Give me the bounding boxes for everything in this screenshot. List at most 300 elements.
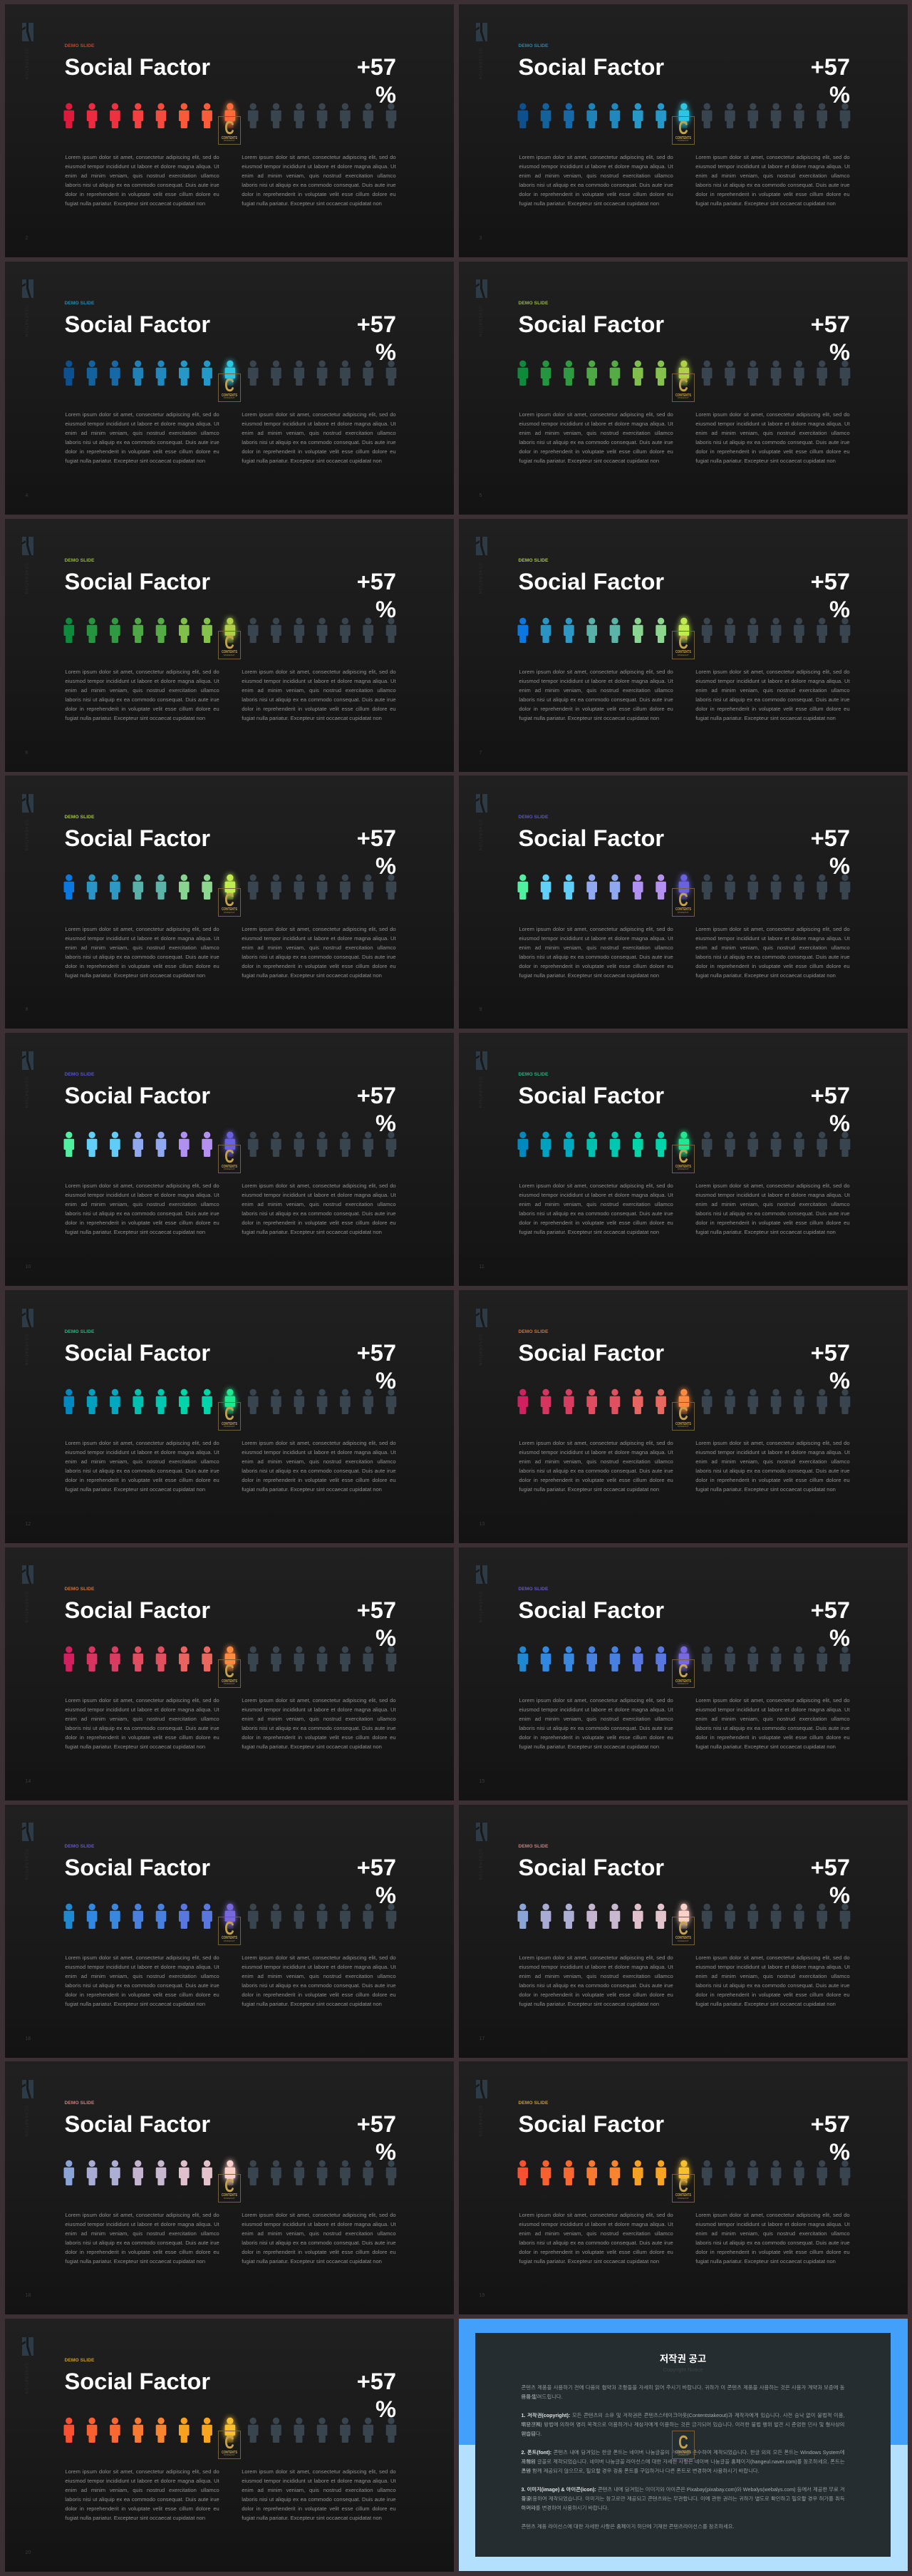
icon row: people <box>517 614 851 644</box>
icon row: people <box>63 1386 398 1418</box>
text left: eiusmod tempor incididunt ut labore et dolore magna aliqua. Ut <box>65 421 219 427</box>
logo <box>21 1051 33 1070</box>
notice subtitle: Copyright Notice <box>663 2366 703 2373</box>
badge: C <box>224 1403 234 1424</box>
title: Social Factor <box>64 1597 210 1623</box>
text right: dolor in reprehenderit in voluptate velit esse cillum dolore eu <box>242 1220 396 1226</box>
text right: laboris nisi ut aliquip ex ea commodo consequat. Duis aute irue <box>242 1468 396 1474</box>
text left <box>65 154 219 207</box>
logo <box>21 2337 33 2356</box>
icon row: people <box>64 356 396 386</box>
logo <box>476 1565 487 1584</box>
title: Social Factor <box>64 568 210 594</box>
text left: eiusmod tempor incididunt ut labore et dolore magna aliqua. Ut <box>519 1449 673 1456</box>
badge <box>672 2431 695 2459</box>
text right <box>695 1696 850 1751</box>
label: DEMO SLIDE <box>519 1329 549 1334</box>
text right: enim ad minim veniam, quis nostrud exercitation ullamco <box>695 172 850 179</box>
text right: dolor in reprehenderit in voluptate velit esse cillum dolore eu <box>242 1477 396 1483</box>
badge: STAKEOUT <box>678 911 689 914</box>
text right: fugiat nulla pariatur. Excepteur sint occaecat cupidatat non <box>695 1486 836 1493</box>
slide 18: orange <box>459 2061 908 2314</box>
text left: fugiat nulla pariatur. Excepteur sint occaecat cupidatat non <box>65 458 205 464</box>
text left: enim ad minim veniam, quis nostrud exercitation ullamco <box>65 687 219 694</box>
value <box>357 53 396 108</box>
text right: Lorem ipsum dolor sit amet, consectetur adipiscing elit, sed do <box>695 1697 850 1704</box>
text left: Lorem ipsum dolor sit amet, consectetur adipiscing elit, sed do <box>65 669 219 675</box>
badge: CONTENTS <box>675 1422 691 1426</box>
page number: 17 <box>479 2036 484 2041</box>
text right: laboris nisi ut aliquip ex ea commodo consequat. Duis aute irue <box>242 954 396 960</box>
badge <box>218 1659 241 1688</box>
logo <box>21 1565 33 1584</box>
text right: fugiat nulla pariatur. Excepteur sint occaecat cupidatat non <box>242 2515 382 2521</box>
text right <box>695 154 850 207</box>
vertical brand text: GENERATION <box>24 2106 28 2138</box>
value: % <box>829 339 850 365</box>
text left: fugiat nulla pariatur. Excepteur sint occaecat cupidatat non <box>519 200 659 207</box>
page number: 10 <box>26 1264 31 1269</box>
text right: enim ad minim veniam, quis nostrud exercitation ullamco <box>695 1201 850 1207</box>
text left <box>65 1696 219 1751</box>
text right: fugiat nulla pariatur. Excepteur sint occaecat cupidatat non <box>695 1743 836 1750</box>
text left <box>519 154 673 207</box>
badge: STAKEOUT <box>224 1425 235 1428</box>
text right: Lorem ipsum dolor sit amet, consectetur adipiscing elit, sed do <box>695 1954 850 1961</box>
text right: fugiat nulla pariatur. Excepteur sint occaecat cupidatat non <box>242 1743 382 1750</box>
text left: dolor in reprehenderit in voluptate velit esse cillum dolore eu <box>65 2249 219 2255</box>
text right <box>695 1953 850 2009</box>
label: DEMO SLIDE <box>519 43 549 48</box>
text right: enim ad minim veniam, quis nostrud exercitation ullamco <box>242 1973 396 1979</box>
text right: eiusmod tempor incididunt ut labore et dolore magna aliqua. Ut <box>695 935 850 942</box>
slide 11: teal <box>4 1290 453 1543</box>
badge <box>218 2431 241 2459</box>
label: DEMO SLIDE <box>519 2101 549 2106</box>
text right: eiusmod tempor incididunt ut labore et dolore magna aliqua. Ut <box>695 421 850 427</box>
text right: eiusmod tempor incididunt ut labore et dolore magna aliqua. Ut <box>242 421 396 427</box>
text left: dolor in reprehenderit in voluptate velit esse cillum dolore eu <box>519 1220 673 1226</box>
text right: enim ad minim veniam, quis nostrud exercitation ullamco <box>242 944 396 951</box>
badge: C <box>678 2431 688 2453</box>
title: Social Factor <box>519 2111 664 2137</box>
label: DEMO SLIDE <box>519 1844 549 1849</box>
value: % <box>829 596 850 622</box>
text right: Lorem ipsum dolor sit amet, consectetur adipiscing elit, sed do <box>695 1440 850 1446</box>
text left: dolor in reprehenderit in voluptate velit esse cillum dolore eu <box>65 706 219 712</box>
value <box>811 53 850 108</box>
badge: CONTENTS <box>222 907 237 912</box>
text left: dolor in reprehenderit in voluptate velit esse cillum dolore eu <box>519 706 673 712</box>
text left: enim ad minim veniam, quis nostrud exercitation ullamco <box>65 1716 219 1722</box>
text right: laboris nisi ut aliquip ex ea commodo consequat. Duis aute irue <box>695 1725 850 1731</box>
text right: enim ad minim veniam, quis nostrud exercitation ullamco <box>242 1458 396 1465</box>
text left: laboris nisi ut aliquip ex ea commodo consequat. Duis aute irue <box>519 1468 673 1474</box>
text left: fugiat nulla pariatur. Excepteur sint occaecat cupidatat non <box>65 2001 205 2007</box>
dark notice card <box>475 2333 891 2557</box>
label: DEMO SLIDE <box>519 1072 549 1077</box>
text left: eiusmod tempor incididunt ut labore et dolore magna aliqua. Ut <box>519 2221 673 2227</box>
text left: Lorem ipsum dolor sit amet, consectetur adipiscing elit, sed do <box>65 926 219 932</box>
text left: eiusmod tempor incididunt ut labore et dolore magna aliqua. Ut <box>519 678 673 684</box>
text left: eiusmod tempor incididunt ut labore et dolore magna aliqua. Ut <box>65 163 219 170</box>
icon row: people <box>517 100 851 130</box>
text left: Lorem ipsum dolor sit amet, consectetur adipiscing elit, sed do <box>519 926 673 932</box>
text right <box>242 1696 396 1751</box>
badge: STAKEOUT <box>678 1682 689 1685</box>
value: +57 <box>357 1339 396 1366</box>
text left: Lorem ipsum dolor sit amet, consectetur adipiscing elit, sed do <box>519 1440 673 1446</box>
badge: CONTENTS <box>222 1422 237 1426</box>
panel: copyright notice <box>459 2319 908 2571</box>
text right: fugiat nulla pariatur. Excepteur sint occaecat cupidatat non <box>242 2001 382 2007</box>
text right <box>695 411 850 464</box>
text left <box>519 1438 673 1494</box>
badge: CONTENTS <box>222 1165 237 1169</box>
text right <box>242 411 396 464</box>
text left: Lorem ipsum dolor sit amet, consectetur adipiscing elit, sed do <box>65 154 219 160</box>
text right: fugiat nulla pariatur. Excepteur sint occaecat cupidatat non <box>242 458 382 464</box>
value: +57 <box>811 1597 850 1623</box>
text right: eiusmod tempor incididunt ut labore et dolore magna aliqua. Ut <box>695 163 850 170</box>
slide 4: green <box>459 262 908 515</box>
text left: Lorem ipsum dolor sit amet, consectetur adipiscing elit, sed do <box>519 1954 673 1961</box>
badge: C <box>678 632 688 653</box>
icon row: people <box>517 356 851 386</box>
slide 10: teal <box>459 1033 908 1286</box>
text left: eiusmod tempor incididunt ut labore et dolore magna aliqua. Ut <box>65 1192 219 1198</box>
text left: Lorem ipsum dolor sit amet, consectetur adipiscing elit, sed do <box>65 1697 219 1704</box>
text left <box>65 669 219 721</box>
text left <box>65 411 219 464</box>
badge: STAKEOUT <box>678 396 689 399</box>
text right: eiusmod tempor incididunt ut labore et dolore magna aliqua. Ut <box>242 678 396 684</box>
title: Social Factor <box>64 311 210 337</box>
text left: eiusmod tempor incididunt ut labore et dolore magna aliqua. Ut <box>519 1192 673 1198</box>
page number: 3 <box>479 236 482 241</box>
text right: enim ad minim veniam, quis nostrud exercitation ullamco <box>242 687 396 694</box>
value <box>357 1853 396 1909</box>
value: +57 <box>811 1339 850 1366</box>
label: DEMO SLIDE <box>64 558 95 563</box>
text left <box>519 1953 673 2009</box>
text left: laboris nisi ut aliquip ex ea commodo consequat. Duis aute irue <box>519 182 673 188</box>
text left: enim ad minim veniam, quis nostrud exercitation ullamco <box>519 2230 673 2237</box>
vertical brand text: GENERATION <box>24 1592 28 1623</box>
text left <box>65 1181 219 1237</box>
badge: STAKEOUT <box>224 654 235 656</box>
text right: dolor in reprehenderit in voluptate velit esse cillum dolore eu <box>695 2249 850 2255</box>
text left <box>519 669 673 721</box>
notice body: 3. 이미지(image) & 아이콘(icon): 콘텐츠 내에 담겨있는 이미지와 아이콘은 Pixabay(pixabay.com)와 Webalys(webalys.com) 등에서 제공한 무료 저작물 <box>522 2486 845 2502</box>
value: +57 <box>357 53 396 80</box>
label: DEMO SLIDE <box>64 1587 95 1592</box>
label: DEMO SLIDE <box>64 1072 95 1077</box>
page number: 4 <box>26 493 28 498</box>
text left: fugiat nulla pariatur. Excepteur sint occaecat cupidatat non <box>519 715 659 721</box>
logo <box>22 279 33 298</box>
badge <box>672 1402 695 1431</box>
text left: fugiat nulla pariatur. Excepteur sint occaecat cupidatat non <box>519 458 659 464</box>
slide 14: blue to indigo <box>459 1547 908 1800</box>
page number: 14 <box>26 1779 31 1784</box>
text left: dolor in reprehenderit in voluptate velit esse cillum dolore eu <box>65 1477 219 1483</box>
slide 5: green <box>4 519 453 772</box>
text left: dolor in reprehenderit in voluptate velit esse cillum dolore eu <box>519 1477 673 1483</box>
badge <box>218 1402 241 1431</box>
text left: laboris nisi ut aliquip ex ea commodo consequat. Duis aute irue <box>65 2240 219 2246</box>
page number: 5 <box>479 493 482 498</box>
value: % <box>375 1882 396 1908</box>
text right: eiusmod tempor incididunt ut labore et dolore magna aliqua. Ut <box>695 1449 850 1456</box>
text right <box>695 669 850 721</box>
page number: 2 <box>26 236 28 241</box>
text left <box>65 1438 219 1494</box>
text left: laboris nisi ut aliquip ex ea commodo consequat. Duis aute irue <box>65 1982 219 1989</box>
text left: eiusmod tempor incididunt ut labore et dolore magna aliqua. Ut <box>65 2221 219 2227</box>
logo <box>476 279 487 298</box>
badge: STAKEOUT <box>224 396 235 399</box>
text left: fugiat nulla pariatur. Excepteur sint occaecat cupidatat non <box>519 1486 659 1493</box>
text left: dolor in reprehenderit in voluptate velit esse cillum dolore eu <box>65 448 219 455</box>
text left: Lorem ipsum dolor sit amet, consectetur adipiscing elit, sed do <box>519 2212 673 2218</box>
badge: C <box>678 2175 688 2196</box>
badge <box>218 373 241 402</box>
text right: laboris nisi ut aliquip ex ea commodo consequat. Duis aute irue <box>242 439 396 445</box>
text right: Lorem ipsum dolor sit amet, consectetur adipiscing elit, sed do <box>695 411 850 418</box>
icon row: people <box>517 1643 852 1676</box>
text left: eiusmod tempor incididunt ut labore et dolore magna aliqua. Ut <box>519 163 673 170</box>
badge: STAKEOUT <box>224 139 235 142</box>
title: Social Factor <box>519 311 664 337</box>
text right: eiusmod tempor incididunt ut labore et dolore magna aliqua. Ut <box>242 1706 396 1713</box>
text right: laboris nisi ut aliquip ex ea commodo consequat. Duis aute irue <box>242 1725 396 1731</box>
text left: enim ad minim veniam, quis nostrud exercitation ullamco <box>519 1973 673 1979</box>
logo <box>476 1051 487 1070</box>
text right: laboris nisi ut aliquip ex ea commodo consequat. Duis aute irue <box>242 2496 396 2503</box>
text right: fugiat nulla pariatur. Excepteur sint occaecat cupidatat non <box>242 2258 382 2265</box>
badge: C <box>678 117 688 138</box>
badge: CONTENTS <box>222 1679 237 1684</box>
text left: enim ad minim veniam, quis nostrud exercitation ullamco <box>519 430 673 436</box>
title: Social Factor <box>64 1339 210 1366</box>
value: +57 <box>357 1854 396 1880</box>
text left: dolor in reprehenderit in voluptate velit esse cillum dolore eu <box>519 1992 673 1998</box>
value: +57 <box>811 825 850 851</box>
text right <box>242 926 396 979</box>
text right: fugiat nulla pariatur. Excepteur sint occaecat cupidatat non <box>242 1229 382 1235</box>
badge <box>672 373 695 402</box>
text left: fugiat nulla pariatur. Excepteur sint occaecat cupidatat non <box>519 2258 659 2265</box>
value: % <box>375 852 396 879</box>
badge: C <box>224 1145 234 1167</box>
logo <box>21 1307 33 1327</box>
text left: fugiat nulla pariatur. Excepteur sint occaecat cupidatat non <box>65 972 205 979</box>
value: % <box>375 81 396 108</box>
text left: eiusmod tempor incididunt ut labore et dolore magna aliqua. Ut <box>519 1964 673 1970</box>
text left: laboris nisi ut aliquip ex ea commodo consequat. Duis aute irue <box>65 2496 219 2503</box>
vertical brand text: GENERATION <box>24 1849 28 1880</box>
text left: enim ad minim veniam, quis nostrud exercitation ullamco <box>65 944 219 951</box>
text left: fugiat nulla pariatur. Excepteur sint occaecat cupidatat non <box>65 200 205 207</box>
label: DEMO SLIDE <box>64 2358 95 2363</box>
label: DEMO SLIDE <box>519 815 549 820</box>
label: DEMO SLIDE <box>519 301 549 306</box>
page number: 8 <box>26 1007 28 1012</box>
value: % <box>375 596 396 622</box>
value <box>357 1339 396 1394</box>
text right: laboris nisi ut aliquip ex ea commodo consequat. Duis aute irue <box>695 2240 850 2246</box>
text right: laboris nisi ut aliquip ex ea commodo consequat. Duis aute irue <box>242 2240 396 2246</box>
badge: STAKEOUT <box>224 2197 235 2200</box>
text right: enim ad minim veniam, quis nostrud exercitation ullamco <box>242 1201 396 1207</box>
slide 9: mint to purple <box>4 1033 453 1286</box>
value <box>357 2367 396 2423</box>
notice body: 콘텐츠 제품 라이선스에 대한 자세한 사항은 홈페이지 하단에 기재한 콘텐츠라이선스를 참조하세요. <box>522 2523 734 2530</box>
text left: laboris nisi ut aliquip ex ea commodo consequat. Duis aute irue <box>519 1210 673 1217</box>
vertical brand text: GENERATION <box>477 563 482 594</box>
text right: fugiat nulla pariatur. Excepteur sint occaecat cupidatat non <box>695 2001 836 2007</box>
badge: STAKEOUT <box>678 654 689 656</box>
value <box>811 825 850 879</box>
text right <box>242 1181 396 1237</box>
badge: STAKEOUT <box>678 1425 689 1428</box>
icon row: people <box>517 1386 852 1418</box>
vertical brand text: GENERATION <box>477 306 482 337</box>
text left: laboris nisi ut aliquip ex ea commodo consequat. Duis aute irue <box>519 954 673 960</box>
slide 2: blue <box>459 4 908 257</box>
icon row: people <box>63 2414 398 2447</box>
slide 12: crimson <box>459 1290 908 1543</box>
slide 7: blue to lime <box>4 776 453 1029</box>
badge: CONTENTS <box>675 907 691 912</box>
text right <box>242 1438 396 1494</box>
icon row: people <box>64 871 396 901</box>
text left: Lorem ipsum dolor sit amet, consectetur adipiscing elit, sed do <box>519 669 673 675</box>
value: % <box>829 1367 850 1393</box>
text left: eiusmod tempor incididunt ut labore et dolore magna aliqua. Ut <box>65 935 219 942</box>
text right: laboris nisi ut aliquip ex ea commodo consequat. Duis aute irue <box>242 182 396 188</box>
text right: dolor in reprehenderit in voluptate velit esse cillum dolore eu <box>695 963 850 969</box>
title: Social Factor <box>64 1082 210 1108</box>
badge: C <box>678 374 688 396</box>
value: % <box>829 852 850 879</box>
notice body: 받습니다. <box>522 2431 542 2437</box>
badge: C <box>678 889 688 910</box>
title: Social Factor <box>64 1854 210 1880</box>
text right: Lorem ipsum dolor sit amet, consectetur adipiscing elit, sed do <box>695 669 850 675</box>
text left: fugiat nulla pariatur. Excepteur sint occaecat cupidatat non <box>519 1743 659 1750</box>
text right: eiusmod tempor incididunt ut labore et dolore magna aliqua. Ut <box>695 1706 850 1713</box>
value <box>357 311 396 365</box>
value: % <box>375 2138 396 2165</box>
value <box>357 2110 396 2165</box>
text left: enim ad minim veniam, quis nostrud exercitation ullamco <box>519 944 673 951</box>
badge: CONTENTS <box>675 393 691 398</box>
slide 3: blue <box>4 262 453 515</box>
slide 13: crimson <box>4 1547 453 1800</box>
text right: eiusmod tempor incididunt ut labore et dolore magna aliqua. Ut <box>695 1192 850 1198</box>
value: % <box>375 1110 396 1136</box>
text left: laboris nisi ut aliquip ex ea commodo consequat. Duis aute irue <box>65 1210 219 1217</box>
text left: laboris nisi ut aliquip ex ea commodo consequat. Duis aute irue <box>65 696 219 703</box>
title: Social Factor <box>64 53 210 80</box>
text left: dolor in reprehenderit in voluptate velit esse cillum dolore eu <box>65 2505 219 2512</box>
text right: eiusmod tempor incididunt ut labore et dolore magna aliqua. Ut <box>242 163 396 170</box>
text left: Lorem ipsum dolor sit amet, consectetur adipiscing elit, sed do <box>65 1954 219 1961</box>
logo <box>22 794 33 813</box>
text right: dolor in reprehenderit in voluptate velit esse cillum dolore eu <box>242 191 396 197</box>
badge <box>672 1145 695 1173</box>
page number: 7 <box>479 751 482 756</box>
text left: fugiat nulla pariatur. Excepteur sint occaecat cupidatat non <box>65 1229 205 1235</box>
text left: laboris nisi ut aliquip ex ea commodo consequat. Duis aute irue <box>65 439 219 445</box>
title: Social Factor <box>519 1597 664 1623</box>
title: Social Factor <box>64 825 210 851</box>
logo <box>476 794 487 813</box>
text right: laboris nisi ut aliquip ex ea commodo consequat. Duis aute irue <box>695 182 850 188</box>
value: % <box>829 2138 850 2165</box>
text left: enim ad minim veniam, quis nostrud exercitation ullamco <box>65 1201 219 1207</box>
text right: Lorem ipsum dolor sit amet, consectetur adipiscing elit, sed do <box>242 2468 396 2475</box>
text right: Lorem ipsum dolor sit amet, consectetur adipiscing elit, sed do <box>695 1183 850 1189</box>
badge: C <box>224 1660 234 1681</box>
text right: enim ad minim veniam, quis nostrud exercitation ullamco <box>695 1458 850 1465</box>
text right <box>695 1438 850 1494</box>
text left: laboris nisi ut aliquip ex ea commodo consequat. Duis aute irue <box>519 1982 673 1989</box>
label: DEMO SLIDE <box>64 815 95 820</box>
text left <box>65 2467 219 2523</box>
notice title: 저작권 공고 <box>660 2354 706 2364</box>
value <box>811 568 850 622</box>
title: Social Factor <box>64 2368 210 2394</box>
notice body: 츠와 함께 제공되지 않으므로, 필요할 경우 정품 폰트를 구입하거나 다른 폰트로 변경하여 사용하시기 바랍니다. <box>522 2468 760 2474</box>
text right: dolor in reprehenderit in voluptate velit esse cillum dolore eu <box>695 706 850 712</box>
text left: laboris nisi ut aliquip ex ea commodo consequat. Duis aute irue <box>65 182 219 188</box>
text right: eiusmod tempor incididunt ut labore et dolore magna aliqua. Ut <box>242 1964 396 1970</box>
badge: STAKEOUT <box>678 2197 689 2200</box>
text left: enim ad minim veniam, quis nostrud exercitation ullamco <box>519 1201 673 1207</box>
value: % <box>829 1882 850 1908</box>
vertical brand text: GENERATION <box>477 2106 482 2138</box>
badge: STAKEOUT <box>224 1168 235 1170</box>
value: % <box>375 1367 396 1393</box>
text left <box>519 1181 673 1237</box>
badge: C <box>678 1917 688 1939</box>
text right: enim ad minim veniam, quis nostrud exercitation ullamco <box>695 687 850 694</box>
badge <box>672 2174 695 2203</box>
icon row: people <box>63 1128 398 1161</box>
text right: Lorem ipsum dolor sit amet, consectetur adipiscing elit, sed do <box>242 2212 396 2218</box>
text right: dolor in reprehenderit in voluptate velit esse cillum dolore eu <box>242 1992 396 1998</box>
badge: STAKEOUT <box>678 2453 689 2456</box>
text left: laboris nisi ut aliquip ex ea commodo consequat. Duis aute irue <box>65 954 219 960</box>
badge: C <box>678 1145 688 1167</box>
logo <box>476 537 487 555</box>
icon row: people <box>517 1900 852 1933</box>
text right: Lorem ipsum dolor sit amet, consectetur adipiscing elit, sed do <box>695 154 850 160</box>
slide 8: mint to purple <box>459 776 908 1029</box>
page number: 18 <box>26 2293 31 2298</box>
value: +57 <box>357 2368 396 2394</box>
badge: STAKEOUT <box>678 139 689 142</box>
notice body: 을 이용하여 제작되었습니다. 이미지는 참고로만 제공되고 콘텐츠와는 무관합니다. 이에 관한 권리는 귀하가 별도로 확인하고 필요할 경우 허가를 취득하거나 <box>522 2495 845 2511</box>
title: Social Factor <box>519 1854 664 1880</box>
title: Social Factor <box>519 825 664 851</box>
vertical brand text: GENERATION <box>477 1849 482 1880</box>
vertical brand text: GENERATION <box>24 1077 28 1108</box>
value: % <box>829 81 850 108</box>
